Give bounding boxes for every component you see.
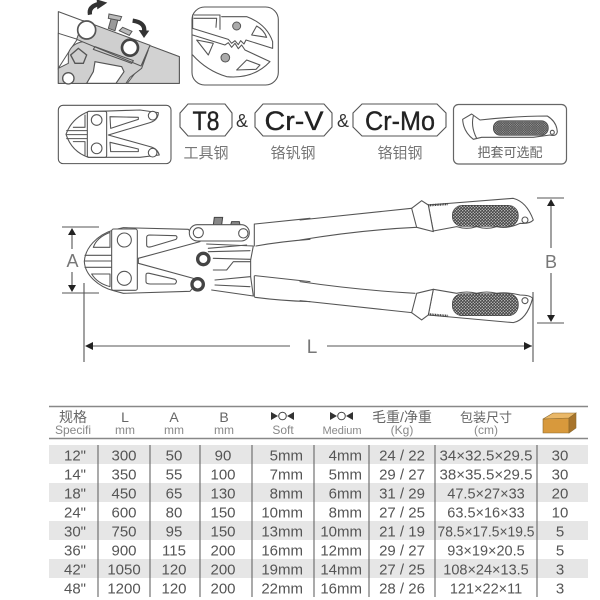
table rows: 120 [161, 562, 187, 578]
badge: T8: T8 [192, 106, 220, 136]
table rows: 100 [210, 466, 236, 484]
table rows: 16mm [320, 580, 362, 598]
table rows: 200 [210, 562, 236, 578]
table rows: 24" [64, 504, 86, 522]
table rows: 63.5×16×33 [447, 506, 525, 522]
table header: L [121, 409, 129, 425]
icon: grip [463, 114, 557, 139]
table header: (cm) [474, 423, 498, 437]
table rows: 38×35.5×29.5 [440, 468, 532, 484]
table rows: 30" [64, 524, 86, 540]
table header: mm [214, 423, 234, 437]
table rows: 8mm [270, 486, 303, 502]
table rows: 10mm [320, 524, 362, 540]
table rows: 42" [64, 562, 86, 578]
table rows: 95 [166, 524, 182, 540]
badge: T8 [180, 104, 232, 162]
table header: (Kg) [391, 423, 413, 437]
table rows: 750 [111, 524, 137, 540]
table rows: 29 / 27 [379, 542, 425, 560]
table header: 包装尺寸 [460, 410, 512, 425]
dimension B [537, 198, 564, 323]
table rows: 28 / 26 [379, 580, 425, 598]
table rows: 12" [64, 448, 86, 464]
table header: mm [164, 423, 184, 437]
badge: Cr-V: Cr-V [264, 106, 324, 136]
badge: Cr-Mo [353, 104, 446, 162]
dimension L [84, 283, 533, 362]
table rows: 600 [111, 504, 137, 522]
table rows: 90 [215, 448, 231, 464]
table rows: 4mm [329, 448, 362, 464]
table rows: 150 [210, 524, 236, 540]
table rows: 93×19×20.5 [447, 544, 525, 560]
table rows: 55 [166, 466, 182, 484]
bolt cutter head and joint [84, 217, 310, 302]
table rows: 21 / 19 [379, 524, 425, 540]
icon: cutter head panel [58, 105, 171, 164]
table rows: 108×24×13.5 [443, 562, 529, 578]
table rows: 18" [64, 486, 86, 502]
caption: grip optional: 把套可选配 [477, 145, 543, 160]
table rows: 120 [161, 580, 187, 598]
table header: A [169, 409, 179, 425]
table rows: 30 [552, 466, 568, 484]
badge: Cr-Mo: Cr-Mo [365, 106, 435, 136]
table header: B [219, 409, 229, 425]
table rows: 7mm [270, 466, 303, 484]
table header [55, 409, 512, 437]
table rows: 78.5×17.5×19.5 [438, 524, 534, 540]
table rows: 13mm [261, 524, 303, 540]
caption: chrome vanadium steel: 铬钒钢 [270, 145, 316, 162]
table rows: 1200 [107, 580, 141, 598]
table rows: 36" [64, 542, 86, 560]
table header: Specifi [55, 423, 91, 437]
table rows: 65 [166, 486, 182, 502]
table rows: 12mm [320, 542, 362, 560]
dimension B: B [545, 252, 557, 272]
table rows: 31 / 29 [379, 486, 425, 502]
icon: adjustment bolt close-up [58, 0, 179, 84]
table rows: 5 [556, 524, 564, 540]
dimension A: A [66, 251, 79, 271]
ampersand: & [236, 111, 248, 131]
table rows: 5mm [329, 466, 362, 484]
table rows: 22mm [261, 580, 303, 598]
table rows: 300 [111, 448, 137, 464]
table rows: 200 [210, 542, 236, 560]
row stripes [49, 445, 588, 578]
table rows: 130 [210, 486, 236, 502]
table rows: 29 / 27 [379, 466, 425, 484]
table rows: 48" [64, 580, 86, 598]
table rows: 27 / 25 [379, 562, 425, 578]
table rows: 8mm [329, 504, 362, 522]
table rows: 16mm [261, 542, 303, 560]
table rows: 14mm [320, 562, 362, 578]
table rules [49, 406, 588, 408]
table rows: 3 [556, 562, 564, 578]
lower handle [300, 282, 533, 323]
table rows: 50 [166, 448, 182, 464]
icon: jaw teeth close-up panel [192, 7, 278, 85]
caption: chrome molybdenum steel: 铬钼钢 [377, 145, 423, 162]
table rows: 450 [111, 486, 137, 502]
icon: carton [543, 413, 576, 433]
table rows: 900 [111, 542, 137, 560]
table rows: 80 [166, 504, 182, 522]
table rows: 24 / 22 [379, 448, 425, 464]
table rows: 200 [210, 580, 236, 598]
table rows: 1050 [107, 562, 141, 578]
table rows: 30 [552, 448, 568, 464]
table rows: 350 [111, 466, 137, 484]
ampersand: & [337, 111, 349, 131]
table rows: 14" [64, 466, 86, 484]
panel: optional grip [454, 104, 566, 164]
table header: 毛重/净重 [372, 409, 432, 425]
badge: Cr-V [255, 104, 332, 162]
table rows: 5mm [270, 448, 303, 464]
dimension A [62, 227, 99, 293]
table rows: 3 [556, 580, 564, 598]
table rows: 115 [162, 542, 186, 560]
table rows: 10mm [261, 504, 303, 522]
table rows: 19mm [261, 562, 303, 578]
table rows: 47.5×27×33 [447, 486, 525, 502]
table rows: 6mm [329, 486, 362, 502]
caption: tool steel: 工具钢 [183, 145, 229, 162]
table rows: 10 [552, 504, 568, 522]
table rows [64, 448, 568, 598]
table header: 规格 [59, 409, 87, 425]
table rows: 150 [210, 504, 236, 522]
table rows: 5 [556, 542, 564, 560]
table header: Medium [322, 425, 362, 437]
table rows: 34×32.5×29.5 [440, 448, 532, 464]
table rows: 27 / 25 [379, 504, 425, 522]
table rows: 121×22×11 [450, 582, 522, 598]
spec table [49, 406, 588, 598]
table rows: 20 [552, 486, 568, 502]
table header: Soft [272, 423, 294, 437]
upper handle [300, 198, 533, 240]
table header: mm [115, 423, 135, 437]
dimension L: L [307, 337, 317, 358]
